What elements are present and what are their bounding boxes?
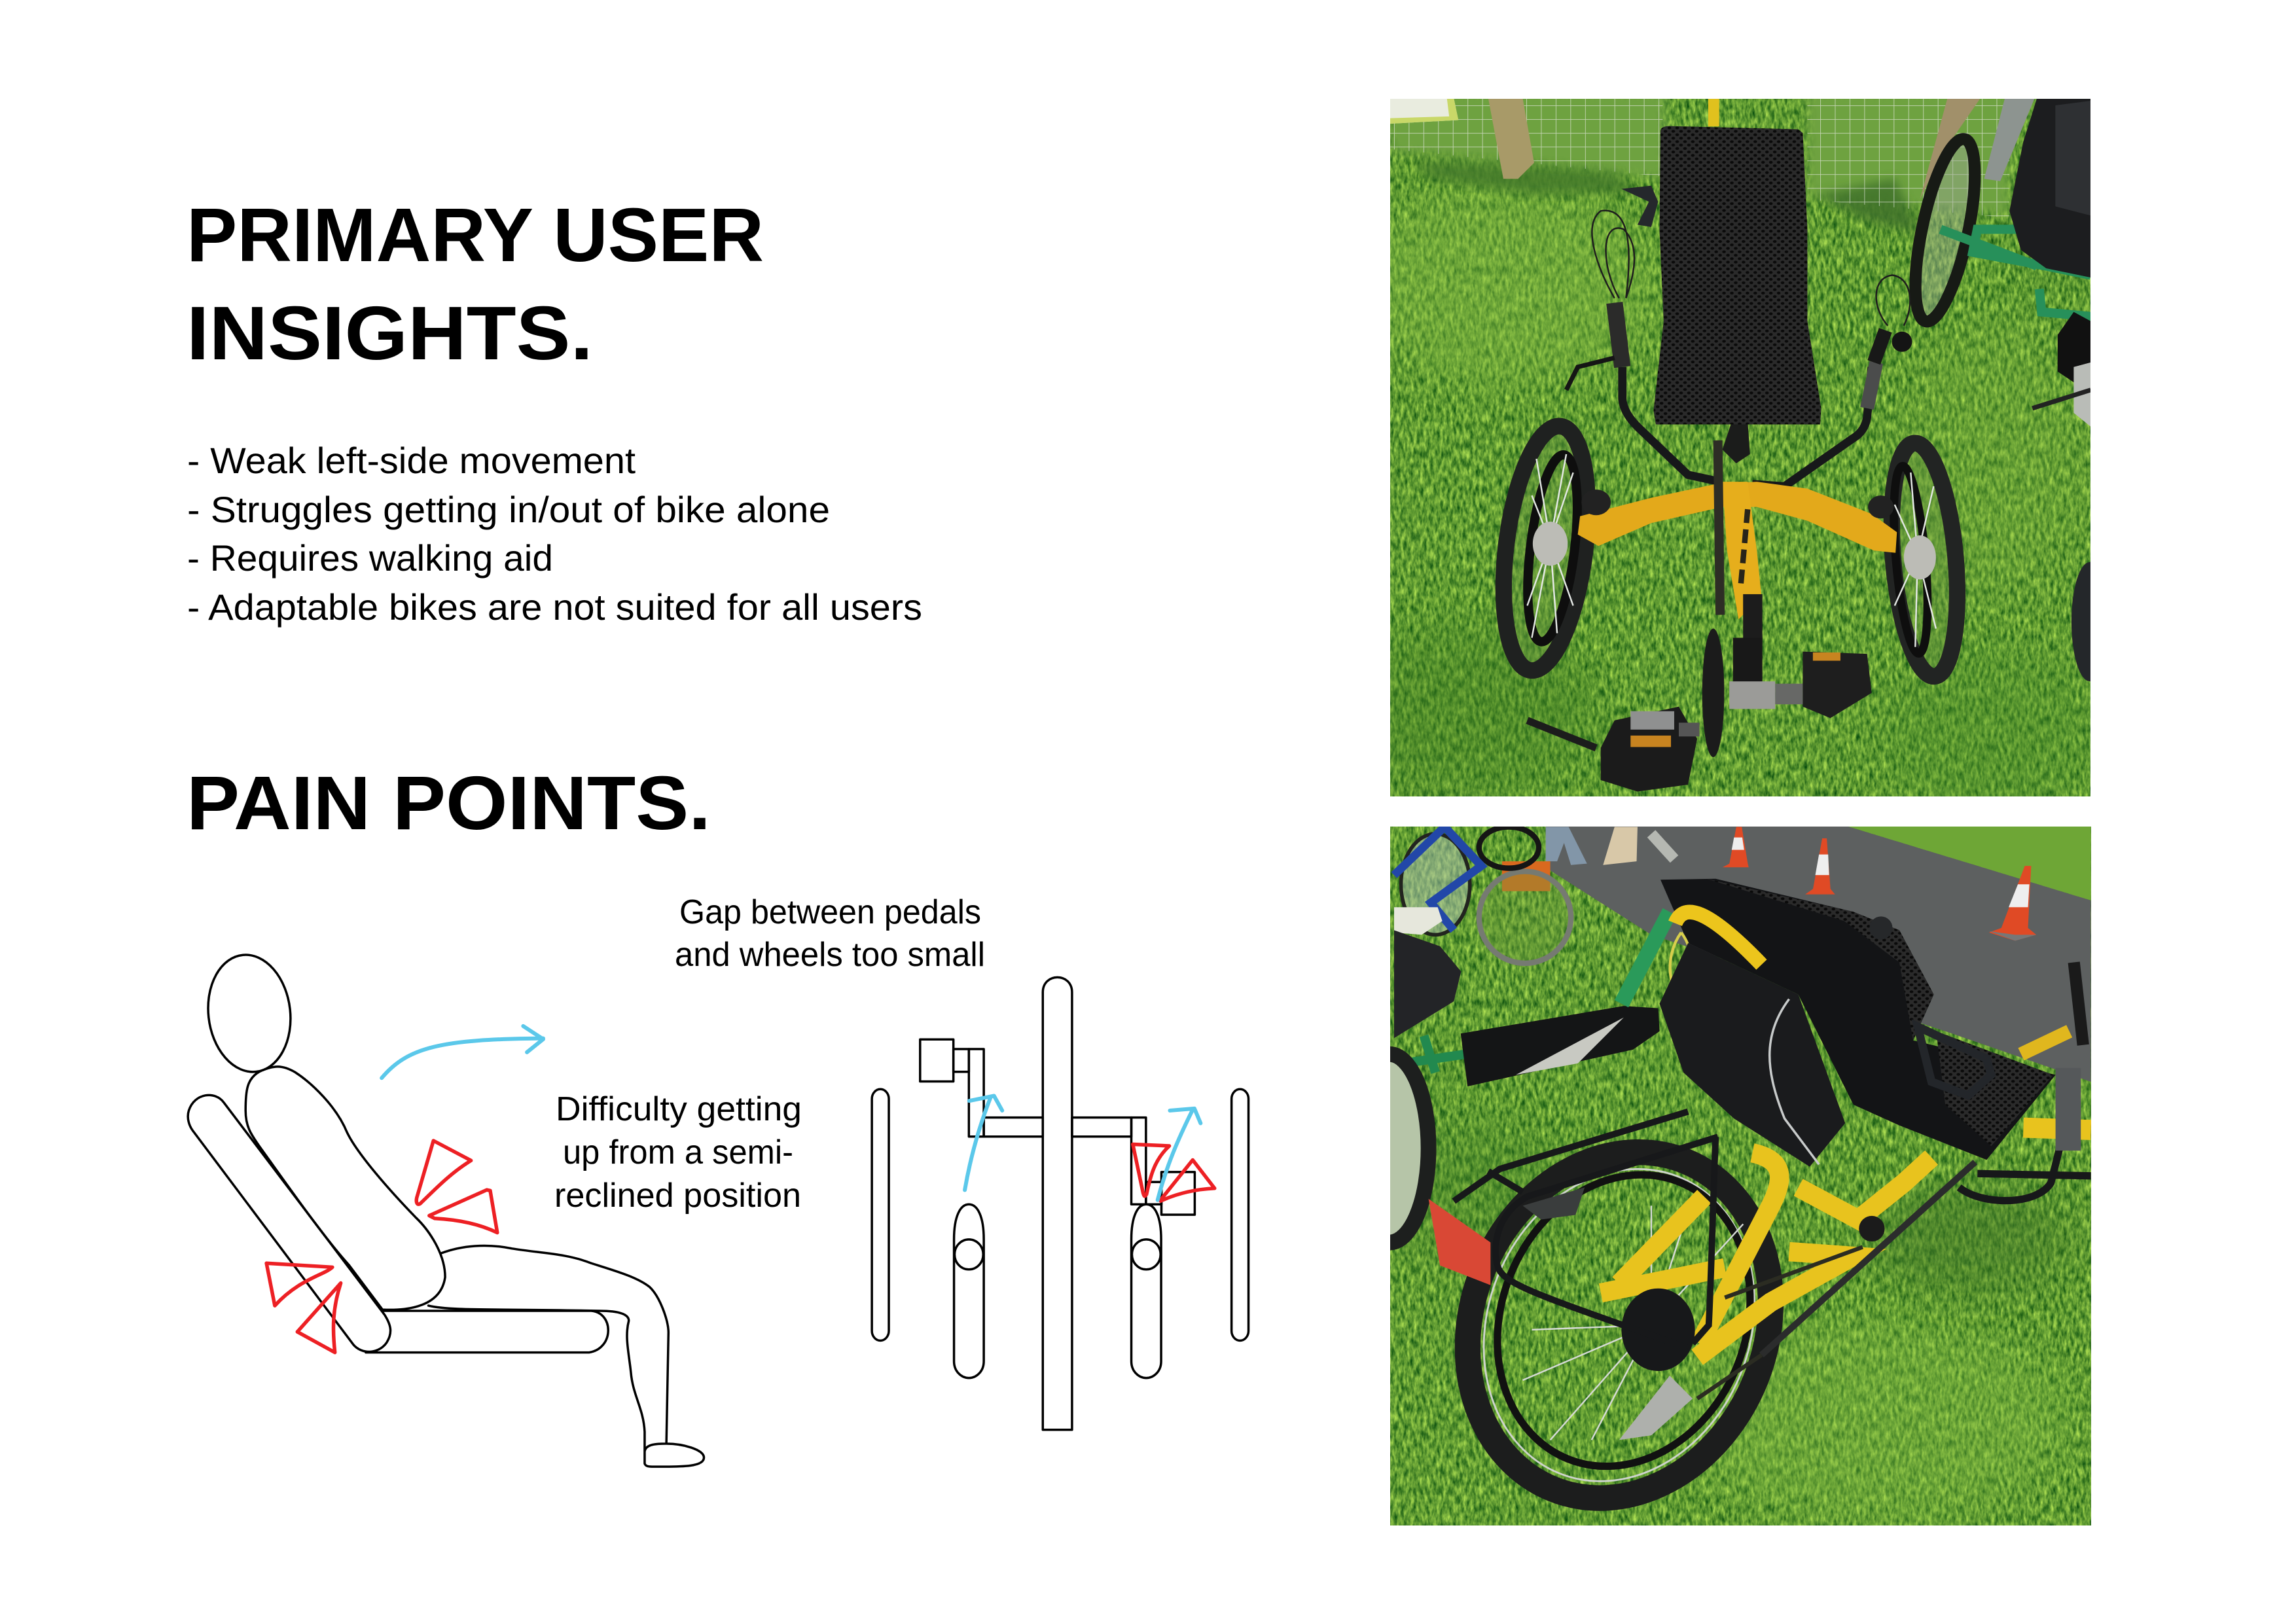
drivetrain and pedals [1527, 594, 1872, 791]
road [1546, 825, 2091, 1082]
title: primary user insights: PRIMARY USER [187, 192, 764, 277]
photo: recumbent trike from the rear [1390, 827, 2091, 1525]
neighbouring trike seat and beam [1350, 834, 1674, 1243]
text block: user insights list: - Requires walking aid [187, 537, 553, 579]
left wheel rail [872, 1089, 889, 1340]
rear wheel [1416, 1106, 1821, 1544]
background fence and hedge [1390, 92, 2009, 234]
diagram: seated person on recumbent seat [188, 951, 704, 1467]
label: pedal gap: and wheels too small [675, 936, 985, 974]
bystanders' legs and bikes [1394, 827, 1638, 963]
arrow: left foot movement [965, 1096, 1002, 1190]
label: getting up difficulty: up from a semi- [563, 1133, 793, 1171]
grass [1385, 825, 2097, 1532]
right wheel rail [1232, 1089, 1249, 1340]
backrest [188, 1095, 391, 1351]
left foot [954, 1204, 984, 1378]
label: getting up difficulty: Difficulty getting [556, 1090, 802, 1128]
diagram: top view of trike [872, 977, 1249, 1430]
left wheel [1492, 421, 1600, 675]
right foot [1132, 1204, 1161, 1378]
far grass [1842, 825, 2091, 901]
grass [1325, 92, 2101, 817]
seat base [366, 1311, 608, 1353]
neighbouring trike [1903, 98, 2108, 681]
text block: user insights list: - Adaptable bikes are not suited for all users [187, 586, 922, 628]
pain markers: lower body and back [266, 1141, 497, 1353]
arrow: getting up direction [382, 1026, 543, 1078]
photo: recumbent trike from the front [1390, 99, 2090, 796]
pain markers: pedal gap [1133, 1144, 1215, 1201]
text block: user insights list: - Struggles getting in/out of bike alone [187, 489, 830, 530]
pannier rack and reflector [1429, 1112, 1718, 1348]
label: getting up difficulty: reclined position [554, 1177, 801, 1215]
arrow: right foot movement [1158, 1109, 1200, 1200]
label: getting up difficulty [554, 1090, 802, 1215]
central frame [1043, 977, 1072, 1430]
label: pedal gap [675, 893, 985, 974]
right wheel [1883, 440, 1965, 679]
title: primary user insights: INSIGHTS. [187, 291, 593, 376]
seat back and base [1660, 879, 2056, 1160]
title: primary user insights [187, 192, 764, 376]
leg and foot [429, 1245, 704, 1467]
head [202, 951, 296, 1076]
yellow rear frame [1601, 1031, 2091, 1440]
yellow frame [1578, 422, 1897, 620]
label: pedal gap: Gap between pedals [679, 893, 981, 931]
torso [245, 1067, 445, 1310]
heading: pain points: PAIN POINTS. [187, 760, 711, 846]
left crank and pedal [920, 1039, 1043, 1137]
traffic cones [1723, 827, 2036, 941]
text block: user insights list: - Weak left-side movement [187, 440, 636, 481]
right crank and pedal [1072, 1118, 1194, 1215]
boom, chain and cables [1697, 962, 2091, 1399]
text block: user insights list [187, 440, 922, 628]
black bag and yellow handle [1660, 912, 1845, 1167]
mesh seat [1653, 126, 1821, 424]
handlebars [1566, 186, 1912, 486]
